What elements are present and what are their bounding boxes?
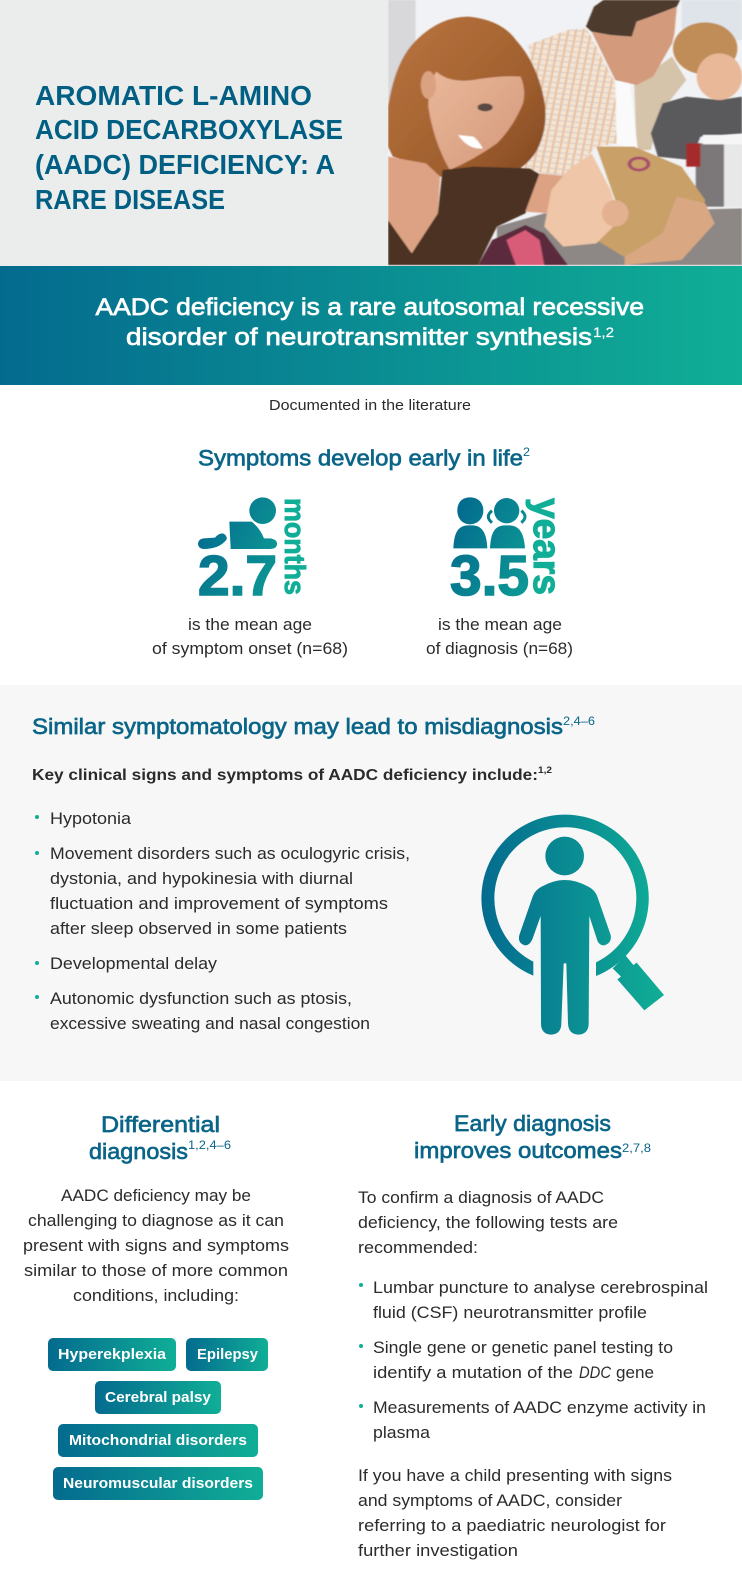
bullet list: tests: gene: [616, 1364, 654, 1382]
paragraph: [23, 1187, 289, 1305]
panel: misdiagnosis: [0, 685, 742, 1081]
banner: [0, 266, 742, 385]
heading: symptoms develop early: Symptoms develop early in life: [198, 446, 523, 470]
caption: [426, 616, 573, 658]
paragraph: present with signs and symptoms: [23, 1237, 289, 1255]
tag: hyperekplexia: [48, 1338, 176, 1371]
title: [35, 80, 343, 215]
banner text: 1,2: [593, 324, 614, 340]
title: RARE DISEASE: [35, 184, 225, 215]
tag: hyperekplexia: Hyperekplexia: [58, 1347, 167, 1363]
bullet list: tests: identify a mutation of the: [373, 1364, 573, 1382]
heading: [89, 1112, 231, 1164]
tag: epilepsy: Epilepsy: [197, 1347, 258, 1363]
caption: is the mean age: [438, 616, 562, 634]
bullet list: tests: Lumbar puncture to analyse cerebrospinal: [373, 1279, 708, 1297]
documented note: Documented in the literature: [269, 398, 471, 414]
closing paragraph: [358, 1467, 672, 1560]
tag: neuromuscular disorders: [53, 1467, 263, 1500]
unit: years: [525, 498, 567, 595]
title: ACID DECARBOXYLASE: [35, 114, 343, 145]
heading: 1,2,4–6: [188, 1138, 231, 1152]
icon: person under magnifying glass: [481, 815, 664, 1035]
bullet list: symptoms: dystonia, and hypokinesia with diurnal: [50, 870, 353, 888]
header panel: [0, 0, 388, 266]
closing paragraph: further investigation: [358, 1542, 518, 1560]
intro paragraph: To confirm a diagnosis of AADC: [358, 1189, 604, 1207]
intro paragraph: [358, 1189, 618, 1257]
bullet list: symptoms: after sleep observed in some patients: [50, 920, 347, 938]
paragraph: challenging to diagnose as it can: [28, 1212, 284, 1230]
heading: Early diagnosis: [454, 1111, 611, 1136]
closing paragraph: If you have a child presenting with signs: [358, 1467, 672, 1485]
heading: Differential: [101, 1112, 220, 1137]
heading: improves outcomes: [414, 1138, 622, 1163]
column: differential diagnosis: [23, 1112, 289, 1500]
bullet list: symptoms: excessive sweating and nasal congestion: [50, 1015, 370, 1033]
bullet list: symptoms: Movement disorders such as oculogyric crisis,: [50, 845, 410, 863]
intro paragraph: recommended:: [358, 1239, 478, 1257]
bullet list: tests: Measurements of AADC enzyme activity in: [373, 1399, 706, 1417]
number: 2.7: [198, 544, 277, 608]
icon: crawling baby: [198, 497, 277, 549]
caption: [152, 616, 348, 658]
number: 3.5: [450, 544, 529, 608]
bullet list: tests: DDC: [579, 1364, 611, 1382]
panel heading: Similar symptomatology may lead to misdiagnosis: [32, 714, 563, 739]
bullet list: tests: [359, 1279, 708, 1442]
tag: cerebral palsy: Cerebral palsy: [105, 1390, 211, 1406]
bullet list: symptoms: Hypotonia: [50, 810, 132, 828]
intro paragraph: deficiency, the following tests are: [358, 1214, 618, 1232]
key signs subheading: Key clinical signs and symptoms of AADC deficiency include:: [32, 767, 538, 784]
panel heading: 2,4–6: [563, 714, 595, 728]
tag: mitochondrial disorders: Mitochondrial disorders: [69, 1433, 247, 1449]
tag: cerebral palsy: [95, 1381, 221, 1414]
bullet list: symptoms: Developmental delay: [50, 955, 218, 973]
closing paragraph: referring to a paediatric neurologist for: [358, 1517, 667, 1535]
caption: of symptom onset (n=68): [152, 640, 348, 658]
paragraph: similar to those of more common: [24, 1262, 288, 1280]
banner text: [96, 294, 644, 351]
heading: symptoms develop early: 2: [523, 445, 530, 459]
heading: [414, 1111, 651, 1163]
heading: 2,7,8: [622, 1141, 651, 1155]
title: AROMATIC L-AMINO: [35, 80, 312, 111]
banner text: AADC deficiency is a rare autosomal recessive: [96, 294, 644, 321]
title: (AADC) DEFICIENCY: A: [35, 149, 335, 180]
tag: epilepsy: [186, 1338, 268, 1371]
bullet list: tests: fluid (CSF) neurotransmitter profile: [373, 1304, 647, 1322]
paragraph: conditions, including:: [73, 1287, 239, 1305]
caption: of diagnosis (n=68): [426, 640, 573, 658]
stat: 3.5 years: [426, 497, 573, 658]
column: early diagnosis: [358, 1111, 708, 1560]
tag: mitochondrial disorders: [58, 1424, 258, 1457]
key signs subheading: 1,2: [538, 765, 552, 776]
bullet list: symptoms: fluctuation and improvement of symptoms: [50, 895, 388, 913]
closing paragraph: and symptoms of AADC, consider: [358, 1492, 623, 1510]
caption: is the mean age: [188, 616, 312, 634]
bullet list: tests: Single gene or genetic panel testing to: [373, 1339, 673, 1357]
bullet list: symptoms: Autonomic dysfunction such as ptosis,: [50, 990, 352, 1008]
photo: family with mother and child: [388, 0, 742, 266]
heading: diagnosis: [89, 1139, 188, 1164]
bullet list: symptoms: [35, 810, 410, 1033]
icon: two children: [453, 497, 525, 548]
banner text: disorder of neurotransmitter synthesis: [126, 324, 592, 351]
bullet list: tests: plasma: [373, 1424, 431, 1442]
unit: months: [278, 498, 310, 595]
stat: 2.7 months: [152, 497, 348, 658]
tag: neuromuscular disorders: Neuromuscular disorders: [63, 1476, 253, 1492]
paragraph: AADC deficiency may be: [61, 1187, 251, 1205]
